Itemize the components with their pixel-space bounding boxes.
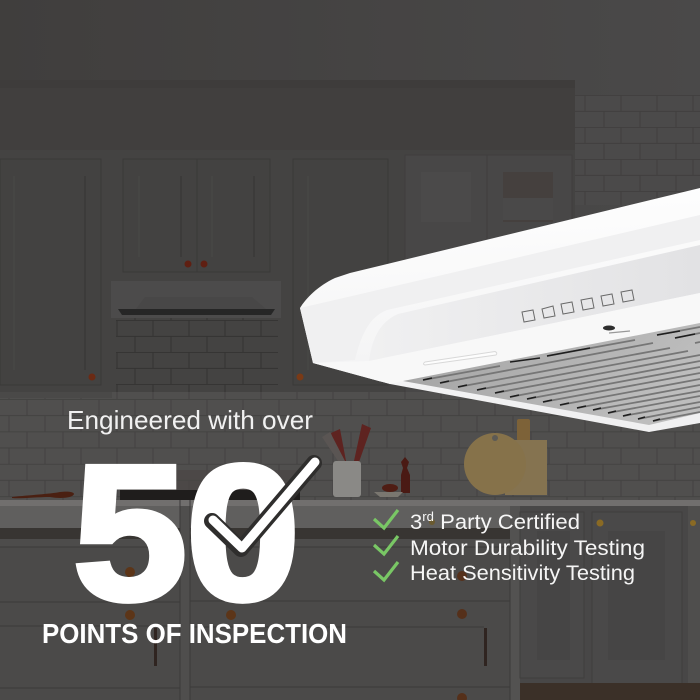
upper cabinets <box>0 150 575 400</box>
countertop <box>0 500 700 547</box>
item: 3rd party certified <box>374 510 580 534</box>
lower cabinets <box>0 500 700 700</box>
spoon <box>12 492 74 498</box>
pepper mill <box>401 457 410 493</box>
small bowl <box>374 492 403 497</box>
heading: engineered with over: Engineered with over <box>67 405 313 435</box>
stove <box>120 470 300 512</box>
lower wall tiles <box>0 392 700 500</box>
item: 3rd party certified: rd <box>422 510 434 524</box>
big number 50: 5 <box>73 425 187 640</box>
upper wall tiles <box>575 95 700 205</box>
cutting board <box>464 419 547 495</box>
item: heat sensitivity testing: Heat Sensitivity Testing <box>410 562 635 585</box>
subheading: points of inspection: POINTS OF INSPECTION <box>42 618 347 649</box>
hood body <box>300 188 700 432</box>
LED light bar <box>424 352 497 365</box>
grease filter <box>403 323 700 425</box>
crown moulding <box>0 80 575 150</box>
item: 3rd party certified: Party Certified <box>434 511 580 534</box>
utensil cup <box>322 424 371 497</box>
product: white under-cabinet range hood <box>300 188 700 432</box>
icon: large check mark over number <box>212 462 315 549</box>
recessed control panel <box>369 245 700 361</box>
brand logo <box>603 326 630 333</box>
lower front strip <box>313 293 700 384</box>
small range hood in photo <box>111 281 281 392</box>
control buttons <box>522 290 634 322</box>
big number 50 <box>73 425 300 640</box>
big number 50: 0 <box>186 425 300 640</box>
angled top band shadow <box>300 215 700 363</box>
item: 3rd party certified: 3 <box>410 511 422 534</box>
item: motor durability testing: Motor Durability Testing <box>410 537 645 560</box>
checklist <box>374 510 645 585</box>
